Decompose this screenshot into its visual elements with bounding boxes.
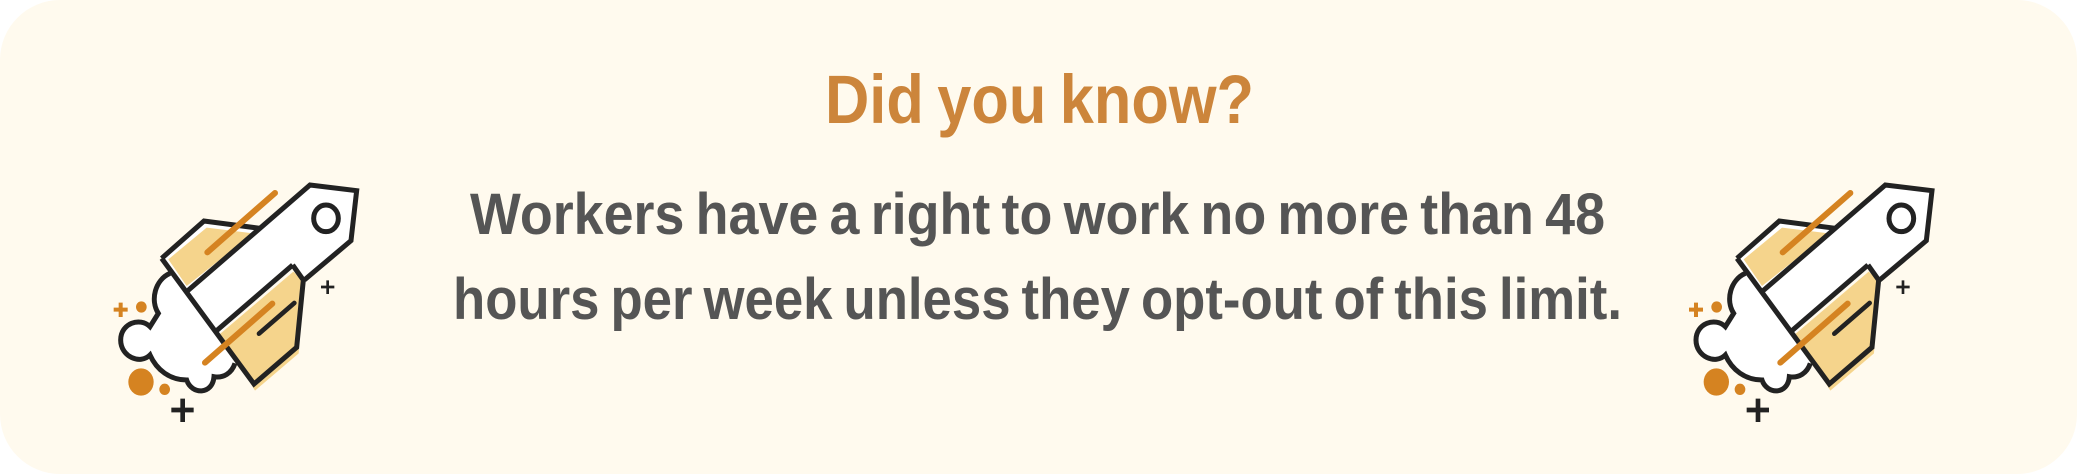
text block: statement: hours per week unless they opt-out of this limit.	[453, 267, 1622, 332]
title: Did you know?	[825, 61, 1254, 138]
text block: statement	[453, 182, 1622, 332]
icon: rocket right	[1689, 185, 1932, 422]
text block: statement: Workers have a right to work no more than 48	[470, 182, 1605, 247]
icon: rocket left	[114, 185, 357, 422]
